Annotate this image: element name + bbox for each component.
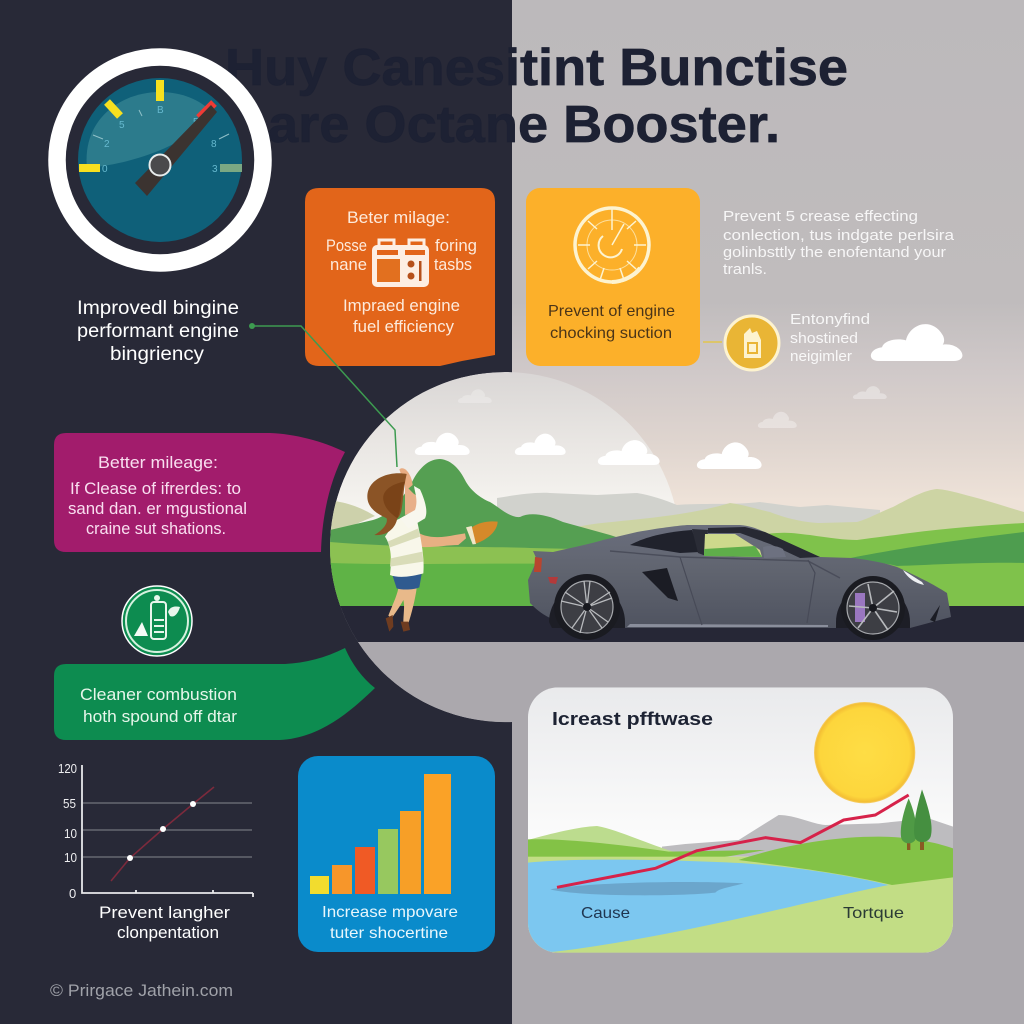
yellow card bbox=[526, 188, 700, 366]
blue card text bbox=[322, 904, 458, 942]
text block: prevent crease: Prevent 5 crease effecting bbox=[723, 208, 918, 225]
side intake bbox=[642, 568, 678, 601]
rear reflector bbox=[548, 577, 558, 584]
orange card text: Posse bbox=[326, 237, 367, 255]
lower grey area bbox=[358, 642, 1024, 1024]
chart caption: Prevent langher bbox=[99, 904, 231, 922]
gauge ring bbox=[57, 57, 263, 263]
engine performance caption: bingriency bbox=[110, 344, 205, 365]
text block: entonyfind: shostined bbox=[790, 330, 858, 347]
panel: better mileage purple bbox=[54, 433, 345, 552]
title: Huy Canesitint Bunctise bbox=[225, 39, 848, 97]
dial numbers: 2 bbox=[104, 139, 110, 150]
sill highlight bbox=[627, 624, 828, 627]
yellow card text bbox=[548, 303, 675, 342]
green card text bbox=[80, 685, 237, 726]
orange card text: Impraed engine bbox=[343, 297, 460, 315]
panel: better mileage orange bbox=[305, 188, 495, 366]
shoes bbox=[386, 615, 410, 632]
panel heading: Icreast pfftwase bbox=[552, 709, 713, 729]
shoulder crease bbox=[610, 551, 840, 578]
dial highlight bbox=[87, 92, 212, 168]
green mountain bbox=[330, 459, 616, 565]
brush bristles bbox=[466, 526, 476, 544]
axis labels: 10 bbox=[64, 850, 77, 865]
wheel arch shadows bbox=[549, 584, 910, 628]
green card bbox=[54, 648, 375, 740]
car body bbox=[528, 525, 951, 628]
purple card text: Better mileage: bbox=[98, 454, 218, 472]
headlight bbox=[903, 570, 924, 585]
text block: prevent crease bbox=[723, 208, 955, 278]
axis labels: 0 bbox=[69, 886, 76, 901]
side window view bbox=[704, 534, 762, 557]
clouds bbox=[415, 386, 887, 469]
shirt bbox=[385, 512, 424, 577]
road bbox=[320, 606, 1024, 642]
rear side window bbox=[630, 530, 700, 553]
shirt stripes bbox=[388, 528, 423, 567]
needle bbox=[135, 105, 217, 196]
dial numbers bbox=[102, 105, 218, 175]
grey mountain bbox=[662, 815, 953, 857]
hair shade bbox=[383, 482, 405, 518]
dark left background bbox=[0, 0, 512, 1024]
axis labels: 55 bbox=[63, 796, 76, 811]
lake bbox=[528, 860, 889, 953]
left green hill bbox=[528, 839, 765, 857]
light hill bbox=[530, 826, 672, 852]
chart caption bbox=[99, 904, 231, 942]
orange card bbox=[305, 188, 495, 366]
dial numbers: 8 bbox=[211, 139, 217, 150]
line chart bbox=[58, 761, 253, 942]
data points bbox=[127, 801, 196, 861]
text block: prevent crease: conlection, tus indgate perlsira bbox=[723, 227, 955, 244]
rear wheel bbox=[554, 574, 620, 640]
green card text: Cleaner combustion bbox=[80, 685, 237, 704]
icon: dial bbox=[575, 208, 649, 282]
mirror bbox=[763, 546, 786, 558]
trend line bbox=[111, 787, 214, 881]
foreground grass bbox=[330, 563, 534, 606]
cause label: Cause bbox=[581, 905, 630, 922]
axis labels: 10 bbox=[64, 826, 77, 841]
orange card text: nane bbox=[330, 256, 367, 274]
orange card text bbox=[326, 209, 477, 336]
dial numbers: 3 bbox=[212, 164, 218, 175]
grey right background bbox=[512, 0, 1024, 642]
dark green band bbox=[840, 532, 1024, 566]
needle hub bbox=[150, 154, 170, 176]
shorts bbox=[393, 574, 422, 589]
trees bbox=[901, 789, 932, 850]
foreground grass bbox=[528, 857, 953, 953]
orange card text: foring bbox=[435, 237, 477, 255]
panel: cleaner combustion bbox=[54, 648, 375, 740]
orange card text: tasbs bbox=[434, 256, 472, 274]
yellow card text: Prevent of engine bbox=[548, 303, 675, 320]
blue card text: Increase mpovare bbox=[322, 904, 458, 921]
torque label: Tortque bbox=[843, 905, 904, 922]
text block: entonyfind: neigimler bbox=[790, 348, 852, 365]
red trend line bbox=[557, 795, 909, 887]
dial numbers: 5 bbox=[193, 117, 199, 128]
woman with brush bbox=[367, 468, 498, 632]
axes bbox=[82, 765, 253, 897]
distant grey hills bbox=[497, 492, 880, 526]
gauge bbox=[57, 57, 263, 263]
text block: entonyfind bbox=[790, 311, 870, 365]
icon: white cloud bbox=[871, 324, 962, 361]
raised sleeve bbox=[400, 486, 426, 528]
chart caption: clonpentation bbox=[117, 924, 219, 942]
windshield bbox=[708, 527, 820, 558]
front wheel bbox=[841, 576, 905, 640]
door pillar bbox=[692, 529, 708, 556]
door lines bbox=[680, 557, 815, 625]
green card text: hoth spound off dtar bbox=[83, 707, 237, 726]
sun bbox=[814, 702, 915, 803]
dial numbers: 5 bbox=[119, 120, 125, 131]
blue card bbox=[298, 756, 495, 952]
text block: prevent crease: tranls. bbox=[723, 261, 767, 278]
title: are Octane Booster. bbox=[268, 96, 780, 154]
bars bbox=[310, 774, 451, 894]
pale olive hills bbox=[580, 489, 1024, 540]
purple card text: sand dan. er mgustional bbox=[68, 500, 247, 518]
grid lines bbox=[83, 803, 252, 857]
purple card text: If Clease of ifrerdes: to bbox=[70, 480, 241, 498]
legs bbox=[388, 588, 417, 623]
footer credit: © Prirgace Jathein.com bbox=[50, 981, 233, 1000]
text block: prevent crease: golinbsttly the enofentand your bbox=[723, 244, 946, 261]
text block: entonyfind: Entonyfind bbox=[790, 311, 870, 328]
connector line bbox=[249, 323, 397, 467]
panel: bar chart blue bbox=[298, 756, 495, 952]
engine performance caption: performant engine bbox=[77, 321, 239, 342]
pale sun disc bbox=[330, 372, 680, 722]
panel sky bbox=[528, 687, 953, 953]
hand bbox=[399, 468, 413, 490]
panel: torque landscape chart bbox=[528, 687, 953, 953]
front vent bbox=[930, 605, 940, 622]
tail light bbox=[534, 557, 542, 572]
landscape scene bbox=[320, 372, 1024, 722]
brush bbox=[472, 521, 498, 544]
right green hill bbox=[739, 837, 953, 885]
pale left hill bbox=[330, 500, 375, 535]
window reflection grass bbox=[704, 546, 762, 557]
icon: yellow badge bbox=[703, 316, 779, 370]
icon: green bottle badge bbox=[122, 586, 192, 656]
dial ticks bbox=[79, 80, 242, 168]
sports car bbox=[528, 525, 951, 640]
axis labels bbox=[58, 761, 77, 901]
panel: prevent engine yellow bbox=[526, 188, 700, 366]
face bbox=[405, 485, 420, 515]
hair bbox=[367, 473, 407, 535]
bright green hills bbox=[768, 523, 1024, 606]
orange card text: Beter milage: bbox=[347, 209, 450, 227]
dial numbers: B bbox=[157, 105, 164, 116]
title bbox=[225, 39, 848, 154]
axis labels: 120 bbox=[58, 761, 77, 776]
blue card text: tuter shocertine bbox=[330, 925, 448, 942]
arm with brush bbox=[415, 530, 466, 547]
yellow card text: chocking suction bbox=[550, 325, 672, 342]
orange card text: fuel efficiency bbox=[353, 318, 455, 336]
purple card text: craine sut shations. bbox=[86, 520, 226, 538]
engine performance caption: Improvedl bingine bbox=[77, 298, 239, 319]
gauge dial bbox=[78, 78, 242, 242]
meadow bbox=[330, 542, 568, 606]
lake shadow bbox=[550, 882, 744, 895]
engine performance caption bbox=[77, 298, 239, 365]
dial numbers: 0 bbox=[102, 164, 108, 175]
purple card text bbox=[68, 454, 247, 538]
icon: fuel tanks bbox=[372, 240, 429, 287]
purple card bbox=[54, 433, 345, 552]
